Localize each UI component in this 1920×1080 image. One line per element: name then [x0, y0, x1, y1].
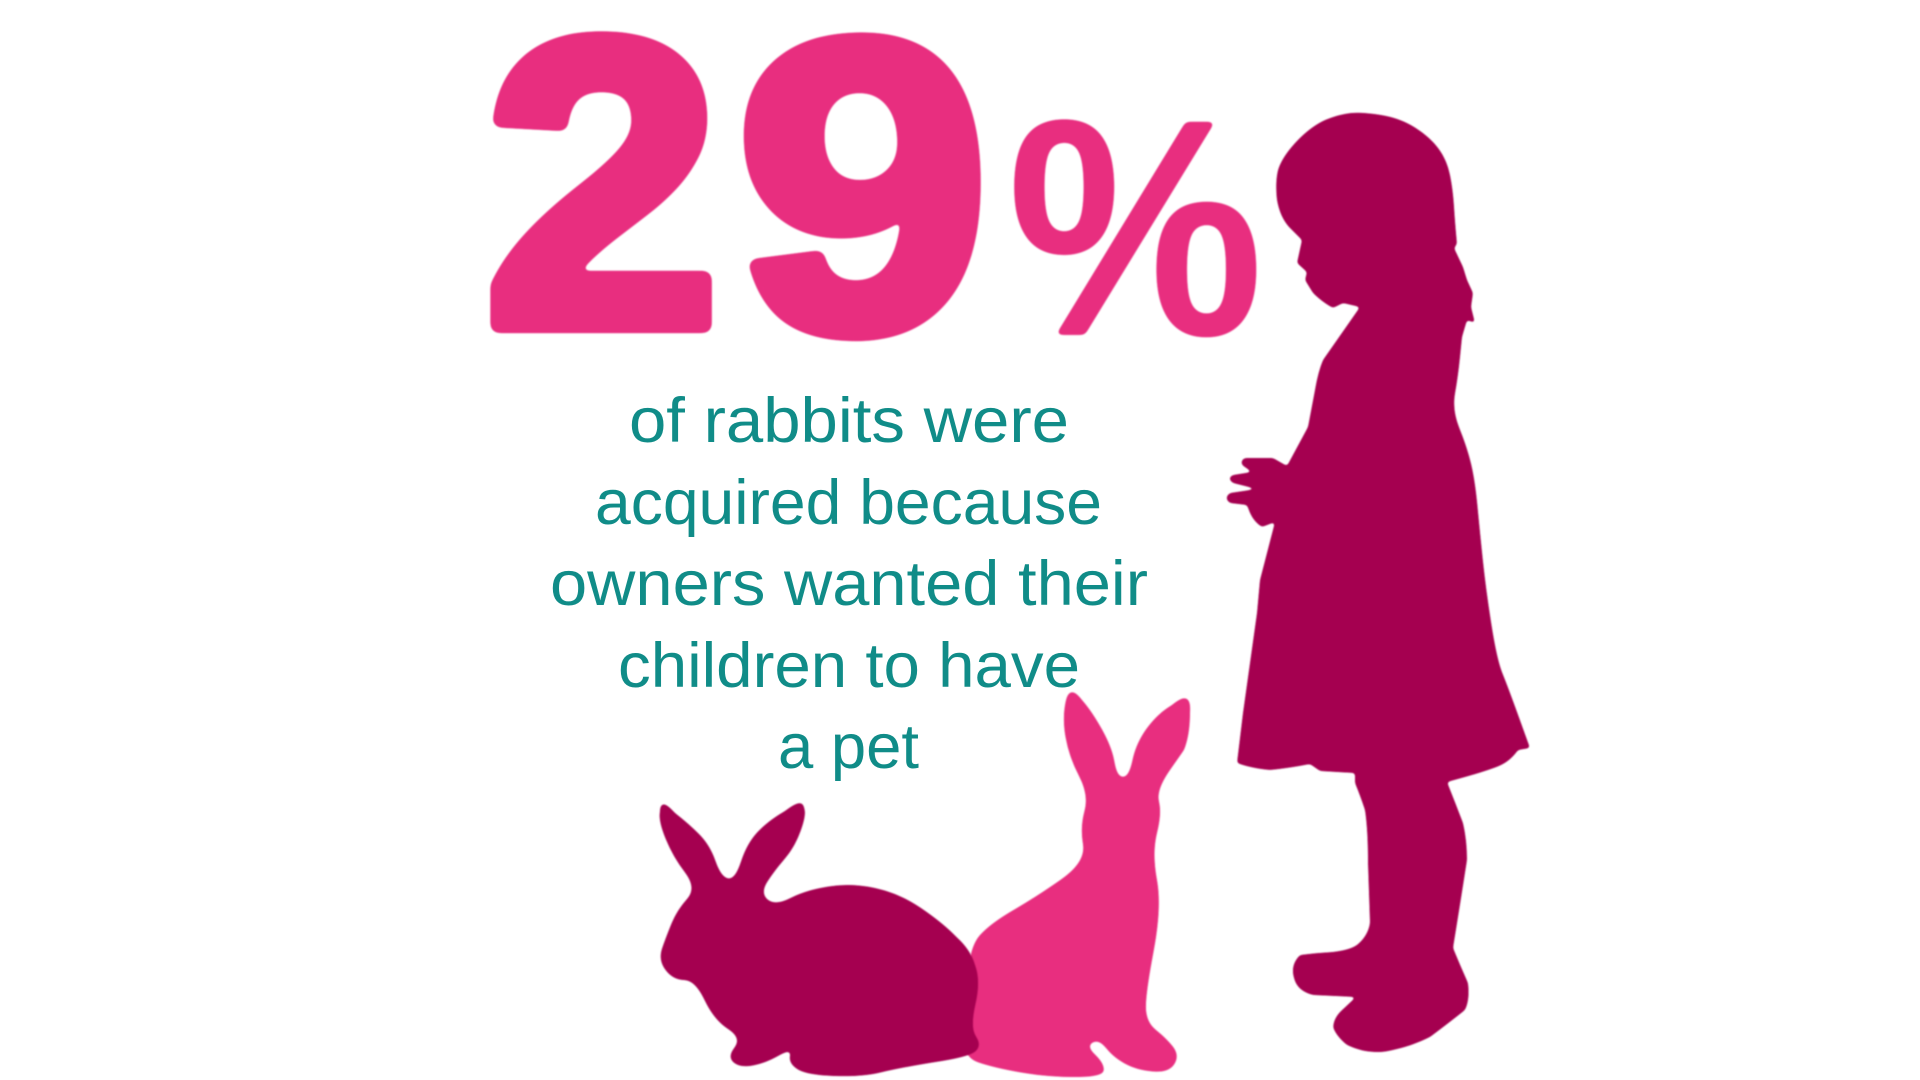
icon: pink sitting rabbit	[964, 692, 1190, 1077]
percent sign: %	[1007, 56, 1264, 401]
line 1: of rabbits were	[629, 386, 1069, 456]
line 5: a pet	[778, 712, 919, 782]
icon: dark crouching rabbit	[660, 803, 979, 1076]
icon: child silhouette	[1226, 113, 1530, 1052]
big statistic: 29%	[484, 0, 1264, 417]
description text	[550, 386, 1148, 782]
line 4: children to have	[618, 631, 1080, 701]
line 3: owners wanted their	[550, 549, 1148, 619]
line 2: acquired because	[595, 468, 1102, 538]
